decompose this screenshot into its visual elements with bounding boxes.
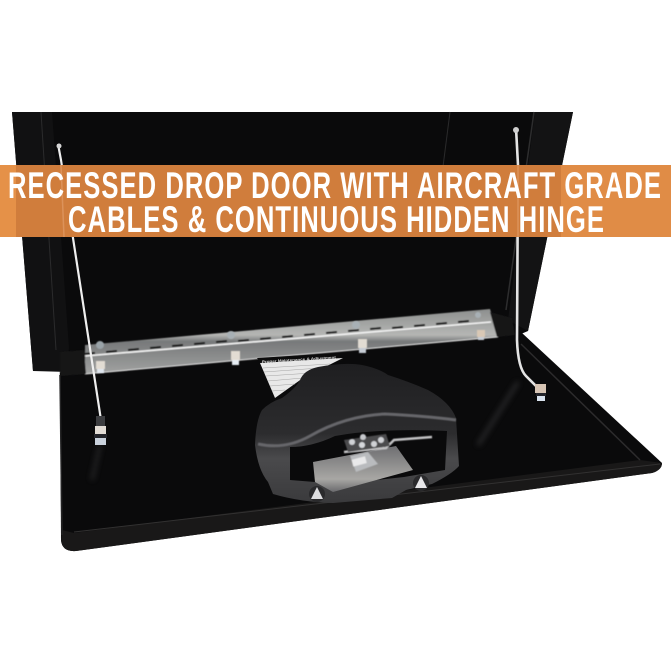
banner heading: [8, 165, 662, 240]
orange banner: [0, 165, 671, 240]
silver latch plate: [313, 446, 413, 492]
toolbox body: [12, 112, 573, 372]
right cable: [513, 127, 546, 401]
drop door: [60, 318, 662, 551]
handle opening: [290, 430, 447, 484]
latch hardware: [344, 434, 432, 472]
latch handle cover: [255, 364, 459, 503]
left cable: [56, 144, 107, 445]
instruction label: Proper Maintenance & Adjustment: [262, 355, 337, 364]
hinge bolts: [96, 312, 485, 373]
continuous hinge: [60, 309, 515, 376]
instruction label: [257, 353, 343, 398]
mounting bolts: [309, 486, 325, 502]
